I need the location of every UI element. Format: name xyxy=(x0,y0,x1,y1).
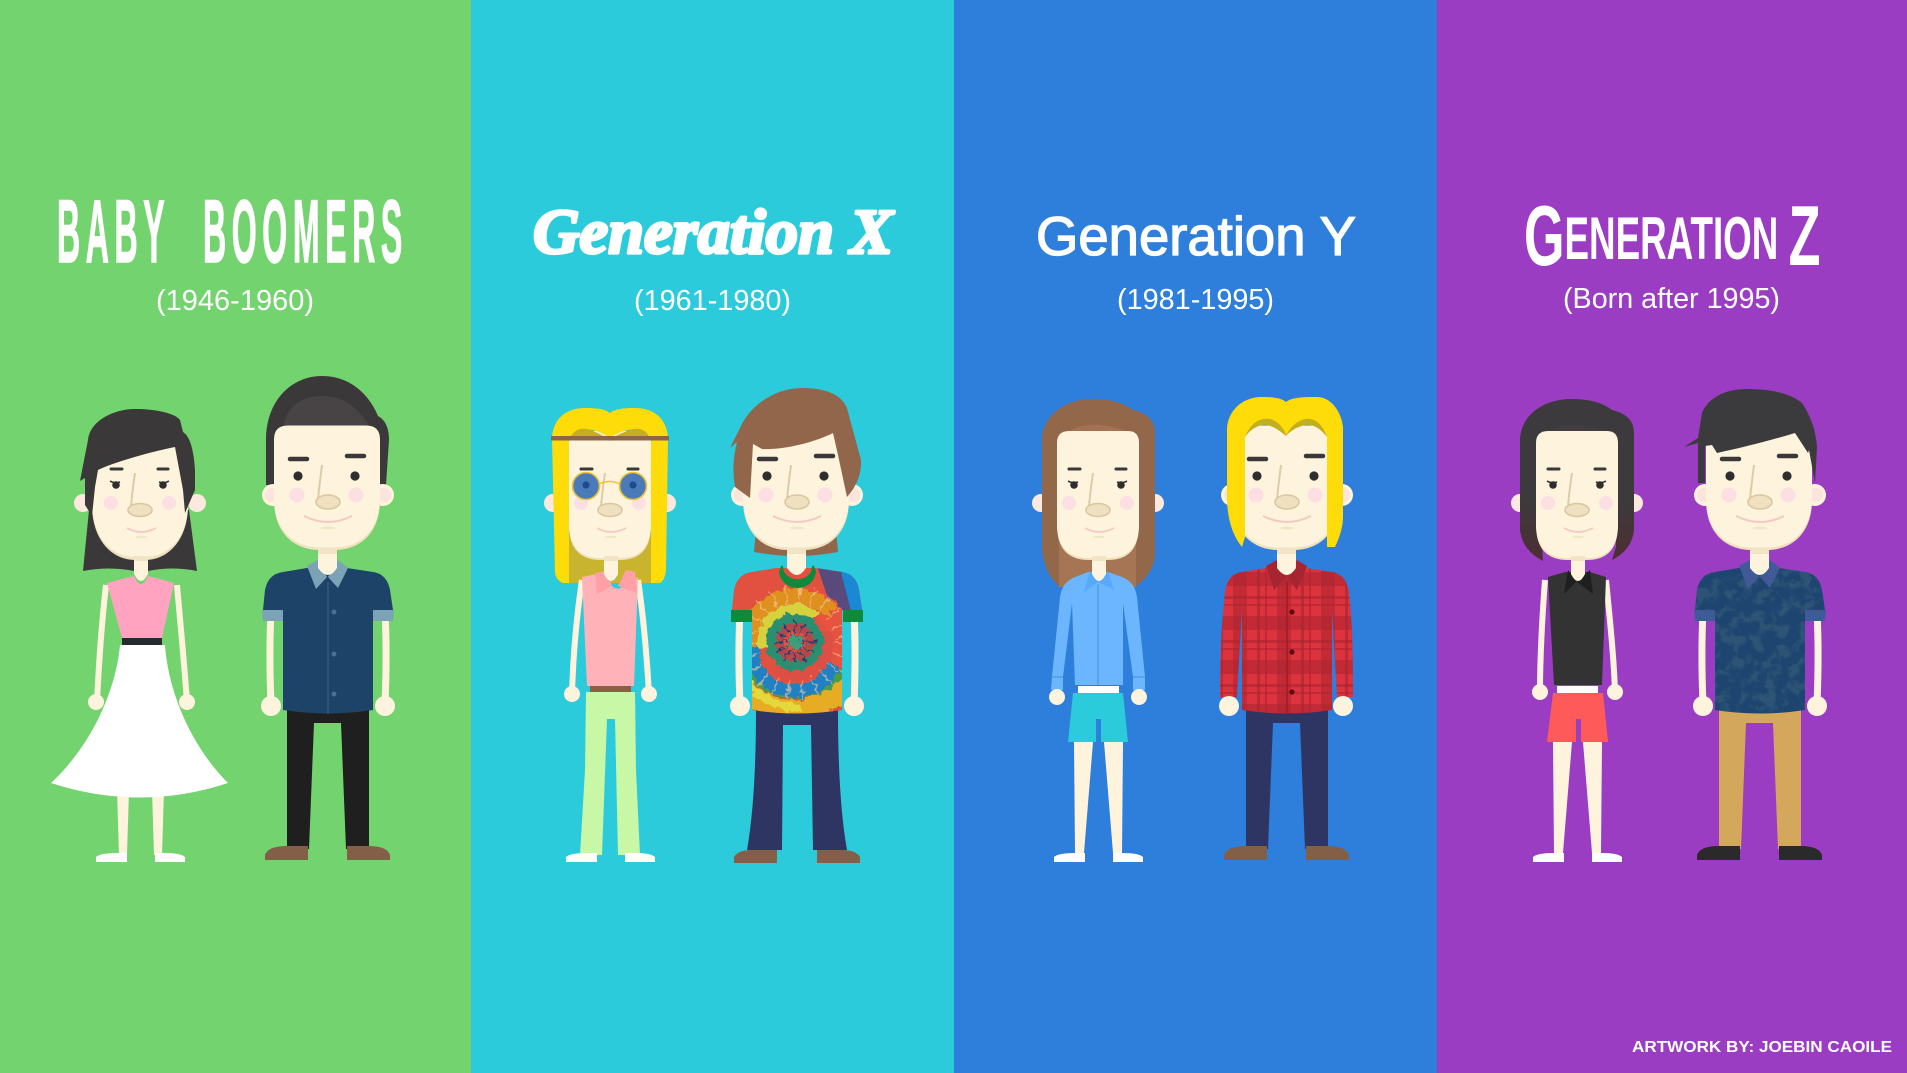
heading: Generation Z: ENERATION xyxy=(1565,205,1778,272)
panel: Generation Z background xyxy=(1437,0,1907,1073)
character: Baby Boomer woman xyxy=(51,409,228,862)
plaid shirt xyxy=(1220,568,1353,714)
date range: Generation Z: (Born after 1995) xyxy=(1563,283,1780,315)
panel: Baby Boomers background xyxy=(0,0,471,1073)
character: Baby Boomer man xyxy=(261,376,395,860)
tie-dye t-shirt xyxy=(732,568,862,714)
heading: Generation Z: G xyxy=(1524,188,1565,283)
heading: Generation X: Generation X xyxy=(533,196,894,267)
character: Generation X man xyxy=(725,388,870,863)
character: Generation X woman xyxy=(544,408,676,862)
heading: Baby Boomers: BABY xyxy=(57,182,170,282)
character: Generation Z woman xyxy=(1511,399,1643,862)
heading: Generation Z: Z xyxy=(1789,188,1820,283)
character: Generation Y man xyxy=(1219,397,1353,860)
character: Generation Z man xyxy=(1684,389,1830,860)
date range: Generation Y: (1981-1995) xyxy=(1117,284,1274,316)
credit: ARTWORK BY: JOEBIN CAOILE xyxy=(1632,1039,1892,1056)
floral shirt xyxy=(1695,568,1825,714)
panel: Generation X background xyxy=(471,0,954,1073)
panel: Generation Y background xyxy=(954,0,1437,1073)
heading: Baby Boomers: BOOMERS xyxy=(203,182,408,282)
heading: Generation Y: Generation Y xyxy=(1036,205,1356,267)
headband xyxy=(551,436,669,440)
date range: Generation X: (1961-1980) xyxy=(634,285,791,317)
character: Generation Y woman xyxy=(1032,399,1164,862)
round sunglasses xyxy=(572,472,646,500)
date range: Baby Boomers: (1946-1960) xyxy=(156,285,314,317)
